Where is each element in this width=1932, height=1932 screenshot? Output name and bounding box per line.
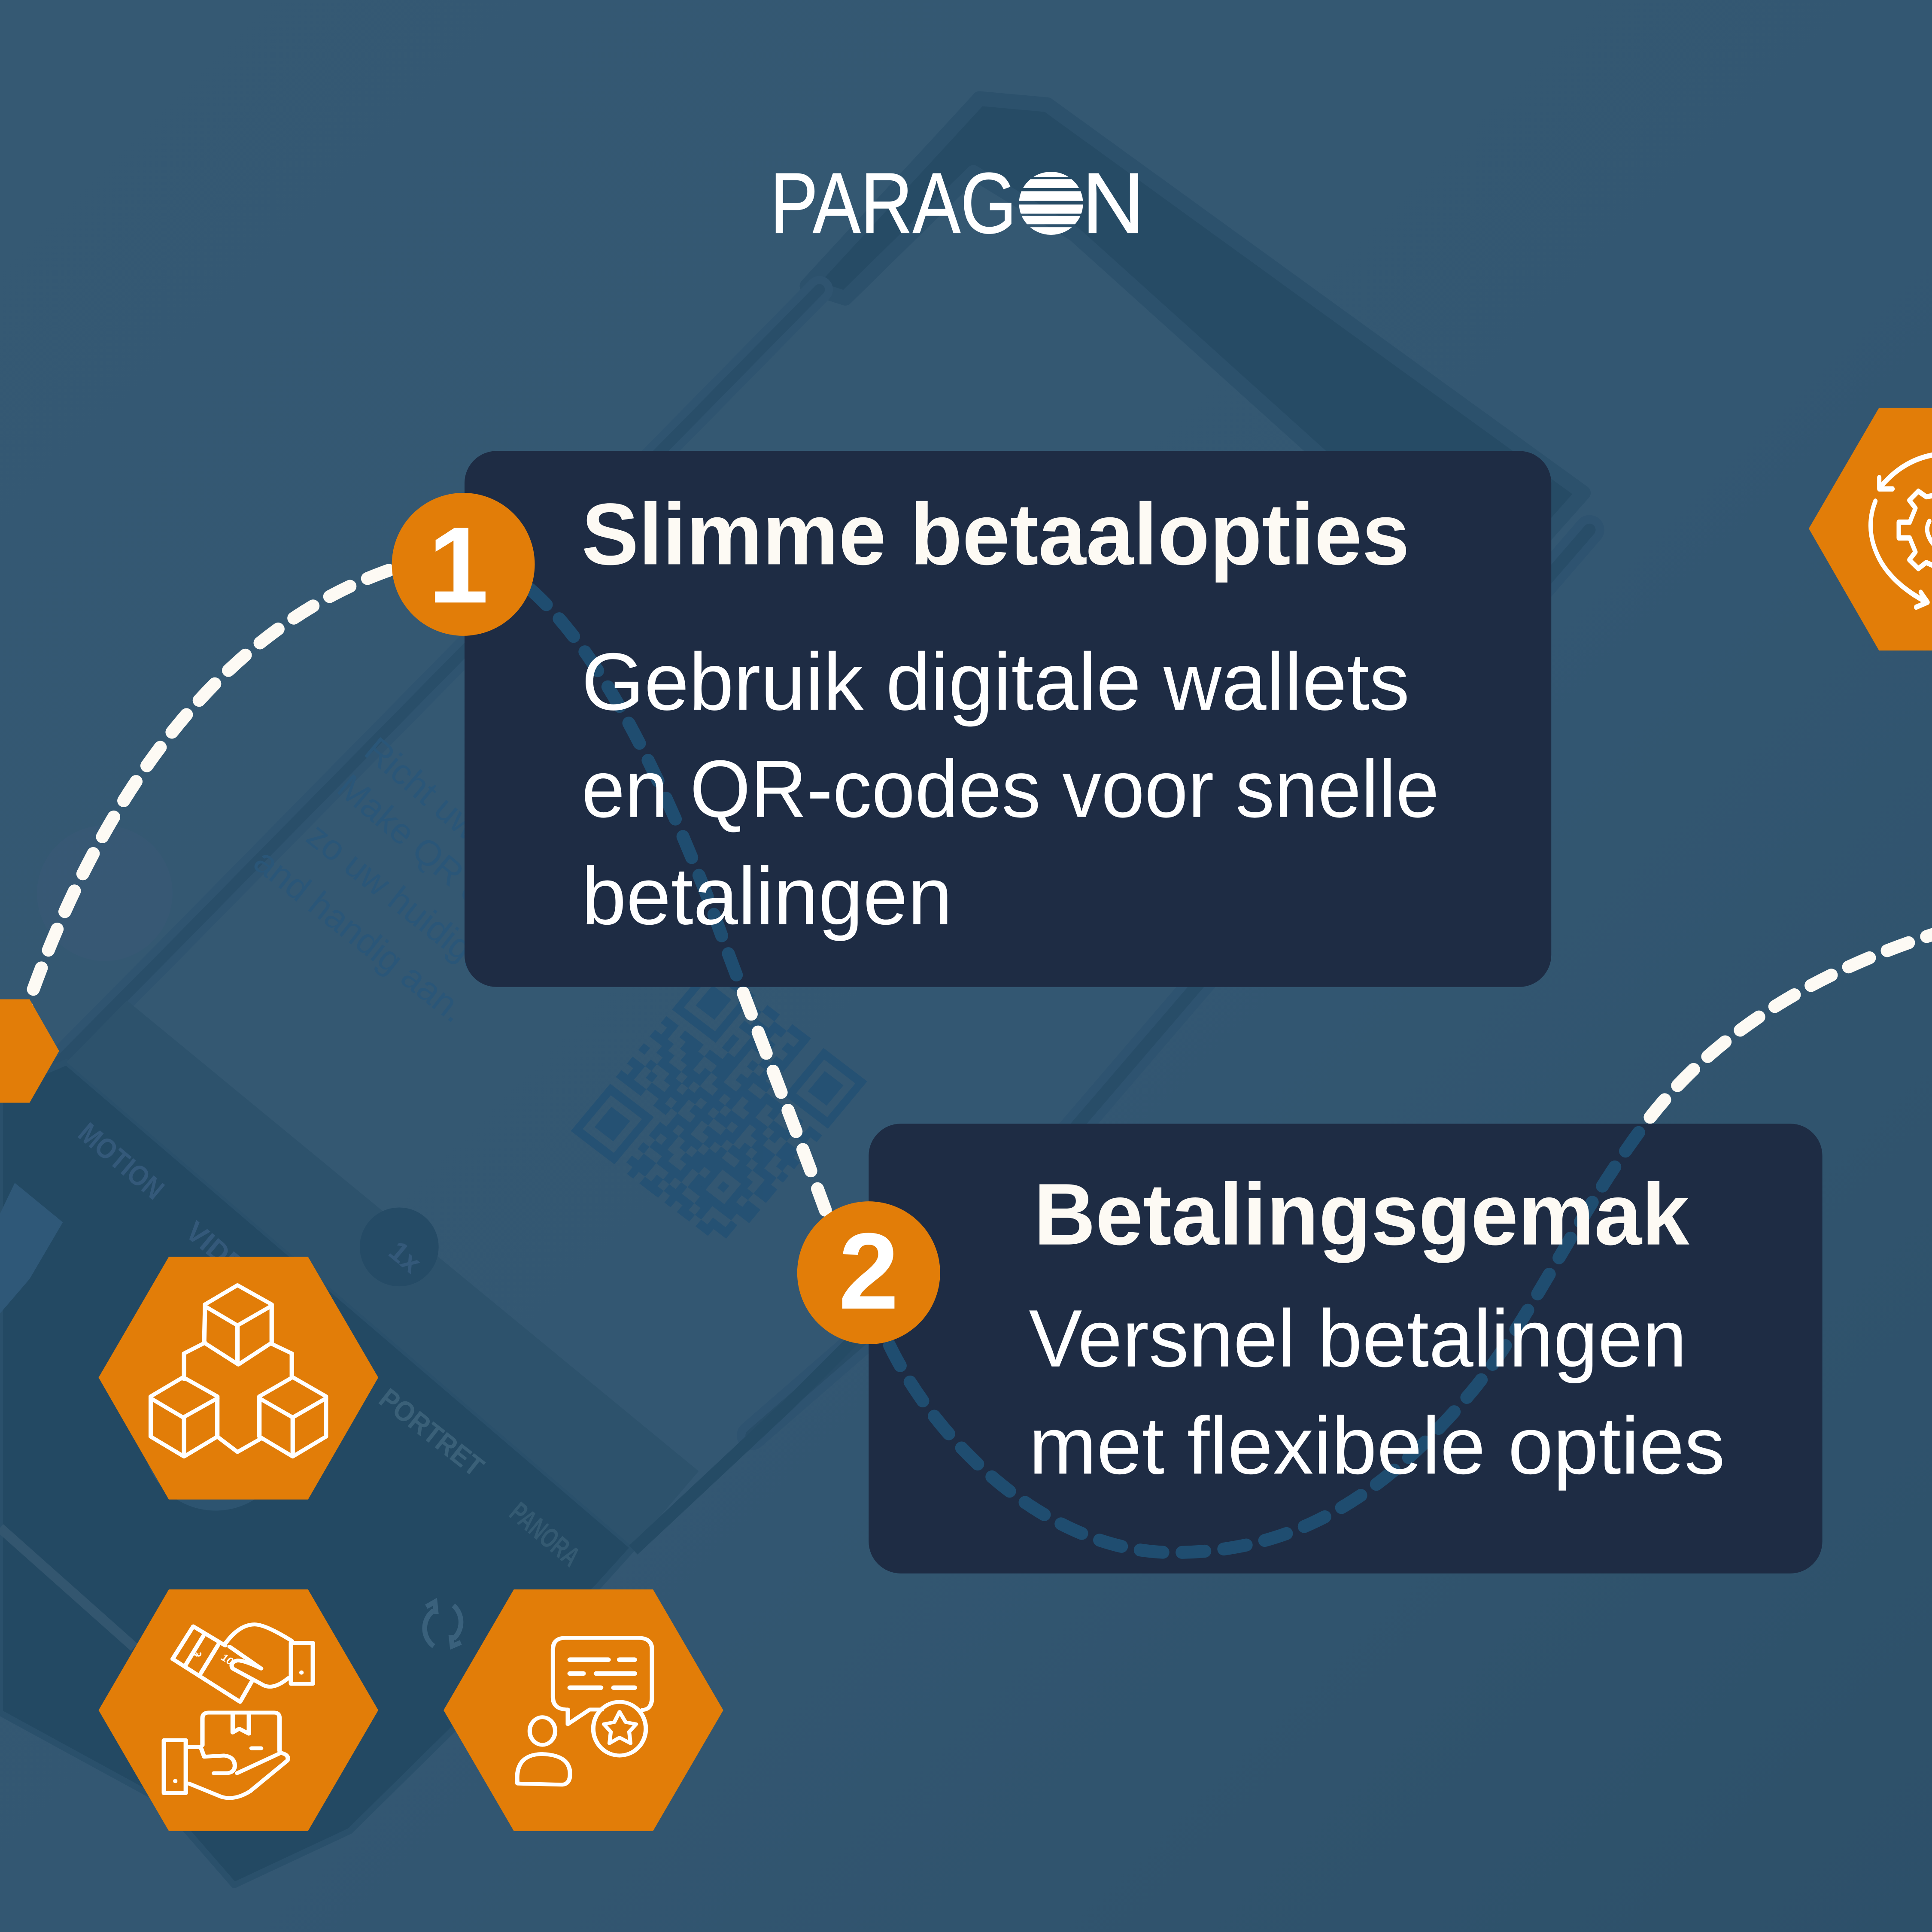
body: step 2 — [1029, 1294, 1725, 1491]
phone lower edge — [633, 1306, 887, 1550]
QR code on screen — [574, 966, 864, 1247]
text: step 2 — [1029, 1166, 1725, 1491]
body: step 1: en QR-codes voor snelle — [582, 744, 1439, 835]
blurred screen instructions: Make QR code — [330, 766, 538, 950]
panel: step 1 background — [465, 451, 1551, 987]
hexagon icon: process gear, right edge — [1809, 408, 1932, 650]
camera labels — [73, 1116, 586, 1572]
dashed route, white on background — [20, 557, 1932, 1552]
body: step 1 — [582, 637, 1439, 942]
number badge 1 — [392, 493, 535, 636]
number badge 1: 1 — [428, 504, 489, 626]
blurred screen instructions — [246, 729, 587, 1030]
shutter ring — [144, 1373, 287, 1510]
streak bottom left — [0, 1528, 134, 1647]
logo: PARAGON — [775, 172, 1138, 235]
heading: Slimme betaalopties: Slimme betaalopties — [582, 486, 1410, 583]
body: step 1: Gebruik digitale wallets — [582, 637, 1410, 727]
phone left edge — [49, 289, 819, 1072]
logo: PARAGON: PARAG — [770, 155, 1017, 251]
hexagon partial left — [0, 999, 59, 1103]
camera labels: VIDEO — [180, 1215, 268, 1296]
camera labels: MOTION — [73, 1116, 170, 1206]
hexagon icon: payment and parcel exchange — [99, 1589, 378, 1831]
blurred screen instructions: and handig aan. — [246, 841, 473, 1030]
number badge 2: 2 — [838, 1210, 899, 1332]
dashed route, blue where it crosses the panels — [527, 583, 1651, 1559]
zoom circle — [360, 1207, 439, 1286]
lighter strip above camera bar — [67, 1000, 699, 1548]
camera labels: PORTRET — [374, 1382, 490, 1483]
phone right edge — [752, 530, 1589, 1435]
blurred screen instructions: zo uw huidige — [300, 815, 496, 981]
logo: PARAGON: N — [1082, 155, 1145, 251]
heading: Betalingsgemak: Betalingsgemak — [1034, 1166, 1689, 1264]
rotate camera icon — [425, 1602, 461, 1646]
body: step 2: met flexibele opties — [1029, 1400, 1725, 1491]
warm patch — [37, 826, 173, 961]
body: step 1: betalingen — [582, 851, 952, 942]
lens reflection — [0, 1183, 63, 1313]
camera labels: 1x — [383, 1235, 428, 1279]
phone top bezel — [807, 99, 1583, 604]
hexagon icon: payment and parcel exchange: € — [189, 1648, 205, 1659]
body: step 2: Versnel betalingen — [1029, 1294, 1687, 1384]
camera control bar — [0, 1062, 633, 1885]
number badge 2 — [797, 1201, 940, 1344]
hexagon icon: connected cubes — [99, 1257, 378, 1500]
panel: step 2 background — [869, 1124, 1823, 1574]
blurred screen instructions: Richt uw camera — [357, 729, 587, 931]
hexagon icon: payment and parcel exchange: 10 — [219, 1652, 236, 1667]
text: step 1 — [582, 486, 1439, 942]
hexagon icon: customer review — [444, 1589, 723, 1831]
camera labels: PANORA — [504, 1496, 586, 1572]
logo globe — [1017, 171, 1085, 236]
